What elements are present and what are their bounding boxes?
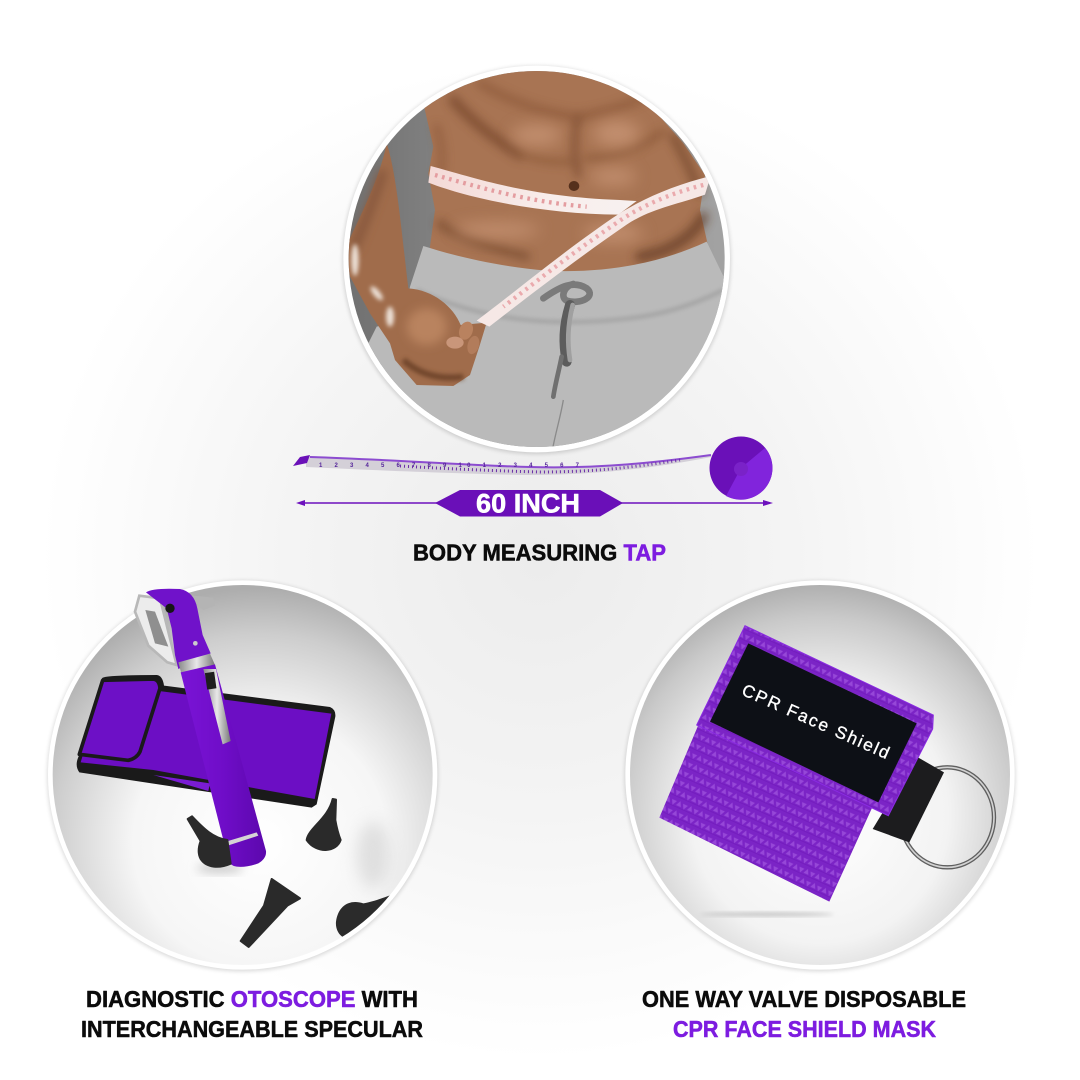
sweatpants xyxy=(360,242,732,460)
caption: CPR face shield mask: ONE WAY VALVE DISPOSABLE xyxy=(642,986,966,1012)
tape ribbon: 1 2 3 4 5 6 7 8 9 10 1 2 3 4 5 6 7 xyxy=(319,463,580,469)
specula xyxy=(188,799,341,947)
otoscope lens window xyxy=(135,596,177,665)
caption: otoscope xyxy=(81,986,423,1042)
caption: body measuring tape: BODY MEASURING TAP xyxy=(413,540,666,566)
60 inch dimension arrow: 60 INCH xyxy=(476,488,580,518)
caption: CPR face shield mask xyxy=(642,986,966,1042)
torso xyxy=(423,60,707,273)
panel: otoscope photo xyxy=(40,575,440,975)
tape ribbon xyxy=(293,455,711,475)
navel xyxy=(569,181,579,191)
caption: CPR face shield mask: CPR FACE SHIELD MASK xyxy=(673,1016,936,1042)
woven pouch xyxy=(659,725,873,902)
panel: waist measuring photo xyxy=(340,60,740,460)
pouch flap: CPR Face Shield xyxy=(739,680,893,763)
caption: otoscope: INTERCHANGEABLE SPECULAR xyxy=(81,1016,423,1042)
caption: otoscope: DIAGNOSTIC OTOSCOPE WITH xyxy=(86,986,418,1012)
tape case xyxy=(710,436,772,500)
measuring tape on waist xyxy=(428,166,711,327)
drawstring xyxy=(543,284,590,397)
pouch flap xyxy=(697,626,933,816)
black strap xyxy=(873,757,944,842)
speculum tip: lower right xyxy=(336,895,390,937)
panel: CPR face shield photo xyxy=(620,575,1020,975)
60 inch dimension arrow xyxy=(296,488,773,518)
arm and hand xyxy=(346,143,487,386)
key ring xyxy=(901,767,994,867)
otoscope xyxy=(135,589,266,867)
measuring tape product xyxy=(293,436,772,500)
carrying pouch xyxy=(77,675,335,808)
